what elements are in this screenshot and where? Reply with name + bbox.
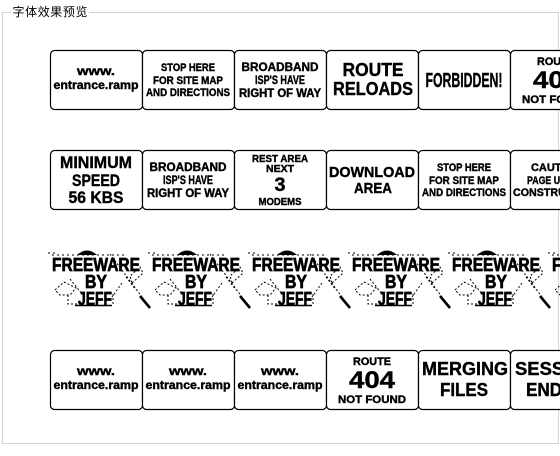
sign: www entrance ramp 3: entrance.ramp xyxy=(238,378,322,392)
logo 3 xyxy=(248,250,350,309)
sign: download area: DOWNLOAD xyxy=(329,164,415,181)
sign: www entrance ramp 2: entrance.ramp xyxy=(146,378,230,392)
sign: broadband: BROADBAND xyxy=(150,162,226,174)
sign: caution partial xyxy=(510,150,560,210)
sign: www entrance ramp 1 xyxy=(50,350,142,410)
sign: rest area xyxy=(234,150,326,210)
sign: stop here xyxy=(418,150,510,210)
sign: www entrance ramp 3: www. xyxy=(260,364,299,378)
sign: rest area: 3 xyxy=(274,175,286,196)
sign: stop here: AND DIRECTIONS xyxy=(422,187,506,199)
sign: www entrance ramp xyxy=(50,50,142,110)
sign: merging files xyxy=(418,350,510,410)
sign: stop here: FOR SITE MAP xyxy=(429,175,499,187)
sign: broadband: RIGHT OF WAY xyxy=(239,88,321,100)
sign: route reloads: RELOADS xyxy=(333,79,413,99)
sign: broadband xyxy=(142,150,234,210)
panel: row 2 signs xyxy=(50,150,560,210)
logo 6 partial xyxy=(548,250,560,309)
sign: minimum speed: MINIMUM xyxy=(60,153,132,172)
sign: stop here xyxy=(142,50,234,110)
sign: www entrance ramp 3 xyxy=(234,350,326,410)
sign: merging files: FILES xyxy=(440,380,488,400)
logo 1 xyxy=(48,250,150,309)
sign: route 404: NOT FOUND xyxy=(338,394,406,406)
sign: session ended partial xyxy=(510,350,560,410)
sign: stop here: AND DIRECTIONS xyxy=(146,87,230,99)
sign: forbidden xyxy=(418,50,510,110)
sign: broadband: RIGHT OF WAY xyxy=(147,188,229,200)
sign: route 404 partial xyxy=(510,50,560,110)
sign: stop here: STOP HERE xyxy=(161,62,215,74)
sign: www entrance ramp 2 xyxy=(142,350,234,410)
sign: www entrance ramp: www. xyxy=(76,64,115,78)
panel: row 4 signs xyxy=(50,350,560,410)
sign: minimum speed: SPEED xyxy=(72,171,120,190)
logo 5 xyxy=(448,250,550,309)
sign: www entrance ramp 1: entrance.ramp xyxy=(54,378,138,392)
sign: stop here: FOR SITE MAP xyxy=(153,75,223,87)
logo 4 xyxy=(348,250,450,309)
sign: route 404 xyxy=(326,350,418,410)
panel: row 3 freeware by jeff logos xyxy=(48,250,560,309)
sign: broadband: ISP'S HAVE xyxy=(163,175,213,187)
sign: stop here: STOP HERE xyxy=(437,162,491,174)
sign: download area: AREA xyxy=(354,180,392,197)
sign: route 404: ROUTE xyxy=(353,356,391,368)
sign: broadband: BROADBAND xyxy=(242,62,318,74)
heading: 字体效果预览 xyxy=(12,4,88,19)
sign: download area xyxy=(326,150,418,210)
sign: minimum speed xyxy=(50,150,142,210)
sign: www entrance ramp: entrance.ramp xyxy=(54,78,138,92)
sign: www entrance ramp 1: www. xyxy=(76,364,115,378)
sign: broadband xyxy=(234,50,326,110)
sign: rest area: MODEMS xyxy=(258,197,302,208)
logo 2 xyxy=(148,250,250,309)
sign: route reloads: ROUTE xyxy=(342,60,404,80)
sign: broadband: ISP'S HAVE xyxy=(255,75,305,87)
sign: forbidden: FORBIDDEN! xyxy=(426,70,502,92)
sign: rest area: REST AREA xyxy=(252,153,308,165)
sign: route reloads xyxy=(326,50,418,110)
sign: route 404: 404 xyxy=(349,367,396,394)
sign: www entrance ramp 2: www. xyxy=(168,364,207,378)
sign: minimum speed: 56 KBS xyxy=(68,188,124,207)
sign: rest area: NEXT xyxy=(266,163,295,175)
panel: row 1 signs xyxy=(50,50,560,110)
sign: merging files: MERGING xyxy=(422,359,508,379)
